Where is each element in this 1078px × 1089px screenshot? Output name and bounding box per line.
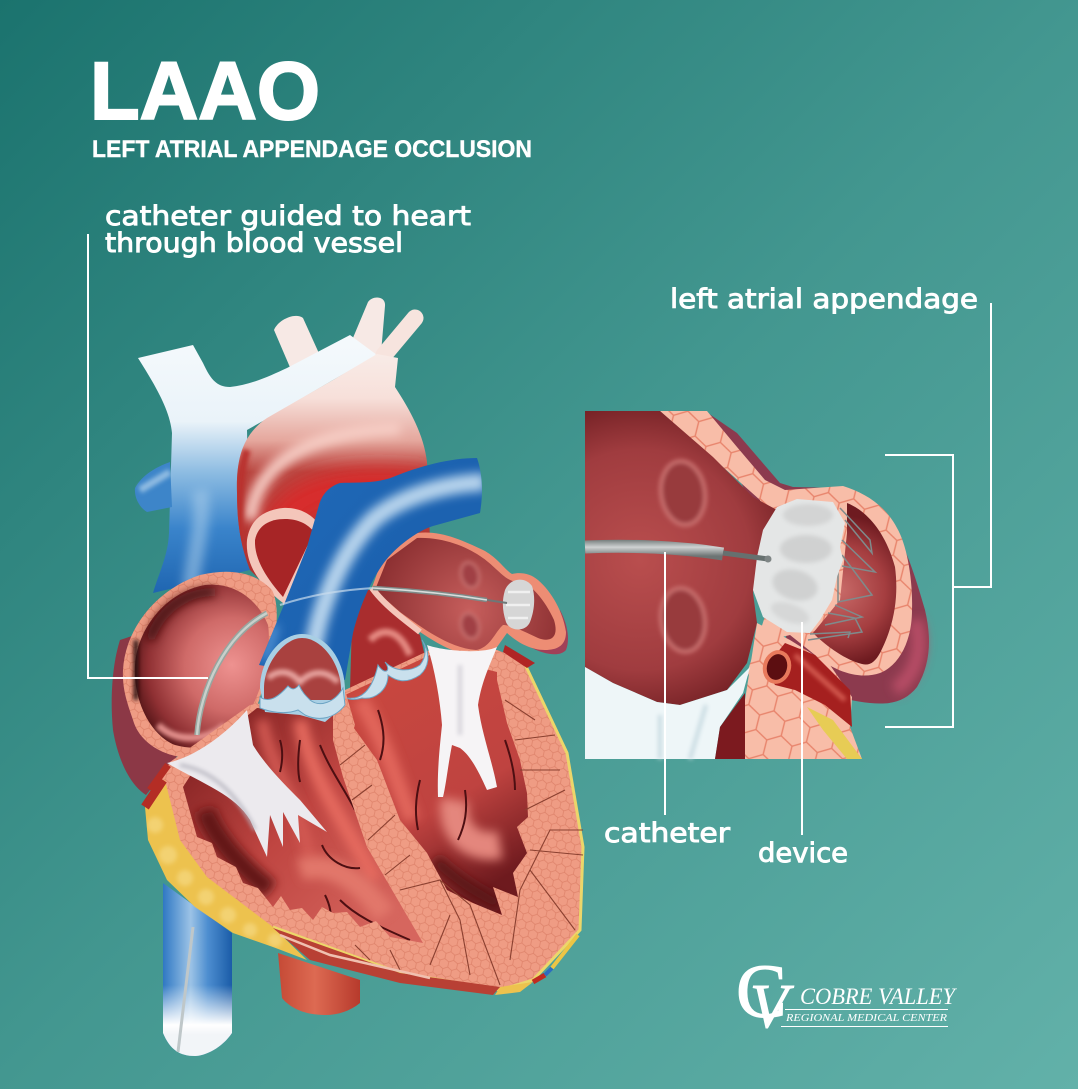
aortic valve xyxy=(347,640,428,700)
pink artery branches xyxy=(274,297,385,372)
superior vena cava xyxy=(135,335,377,593)
aortic root behind pulmonary trunk xyxy=(350,588,427,690)
catheter in right atrium xyxy=(197,613,267,735)
occlusion device xyxy=(753,499,845,633)
striped apical band xyxy=(273,928,578,995)
pulmonary valve xyxy=(260,634,345,722)
title: LAAO xyxy=(90,46,320,137)
logo monogram: C xyxy=(736,950,787,1034)
white chordae xyxy=(585,667,750,759)
small coronary vessel xyxy=(503,645,535,668)
label: left atrial appendage: left atrial appendage xyxy=(670,284,978,315)
logo name: COBRE VALLEY xyxy=(800,984,957,1009)
label: catheter guided to heart: catheter guided to heart xyxy=(105,201,471,232)
white chordae left ventricle xyxy=(427,645,497,797)
logo monogram: V xyxy=(750,973,794,1041)
catheter through left atrium xyxy=(373,588,507,603)
logo: Cobre Valley Regional Medical Center xyxy=(736,950,957,1041)
coronary vessel xyxy=(762,643,852,727)
myocardium xyxy=(145,650,583,990)
outer maroon wall xyxy=(705,411,929,704)
callout lines xyxy=(88,234,991,835)
pulmonary vein openings xyxy=(657,458,709,528)
label: catheter guided to heart: through blood vessel xyxy=(105,228,403,259)
label: device: device xyxy=(758,838,848,869)
dark muscle wedge xyxy=(715,693,745,759)
white chordae right ventricle xyxy=(167,710,327,857)
lower muscle wall xyxy=(743,623,862,759)
epicardial fat band xyxy=(145,765,307,960)
inferior vena cava xyxy=(163,883,232,1056)
heart illustration xyxy=(112,297,583,1056)
label: catheter guided to heart xyxy=(105,201,471,259)
descending aorta xyxy=(278,953,360,1015)
left atrium interior xyxy=(585,411,777,705)
inset: left atrial appendage close-up xyxy=(585,411,929,759)
inset catheter xyxy=(585,546,772,562)
label: catheter: catheter xyxy=(604,818,731,849)
line: left atrial appendage bracket xyxy=(885,303,991,727)
line: device label xyxy=(801,622,803,835)
pulmonary trunk xyxy=(259,458,485,680)
line: catheter label xyxy=(664,552,666,815)
implant device in small heart xyxy=(503,580,534,630)
muscle wall with cells xyxy=(660,411,912,680)
logo subtitle: REGIONAL MEDICAL CENTER xyxy=(785,1013,948,1024)
yellow fat strip xyxy=(807,707,862,759)
lower appendage lobe highlight xyxy=(895,620,919,690)
left atrium xyxy=(370,532,568,657)
left ventricle cavity xyxy=(343,655,528,915)
septum wall top xyxy=(333,690,355,760)
right ventricle cavity xyxy=(183,708,423,943)
right atrium xyxy=(123,572,277,758)
myocardium vessels xyxy=(340,700,583,985)
device wire frame xyxy=(808,508,875,640)
subtitle: LEFT ATRIAL APPENDAGE OCCLUSION xyxy=(92,136,532,163)
aortic opening ring xyxy=(247,508,322,610)
aorta xyxy=(237,318,430,620)
appendage interior xyxy=(813,503,896,665)
chordae shading xyxy=(660,705,706,759)
catheter ghost across trunk xyxy=(280,588,373,605)
back wall of heart xyxy=(112,620,190,795)
line: catheter guided label xyxy=(88,234,208,678)
